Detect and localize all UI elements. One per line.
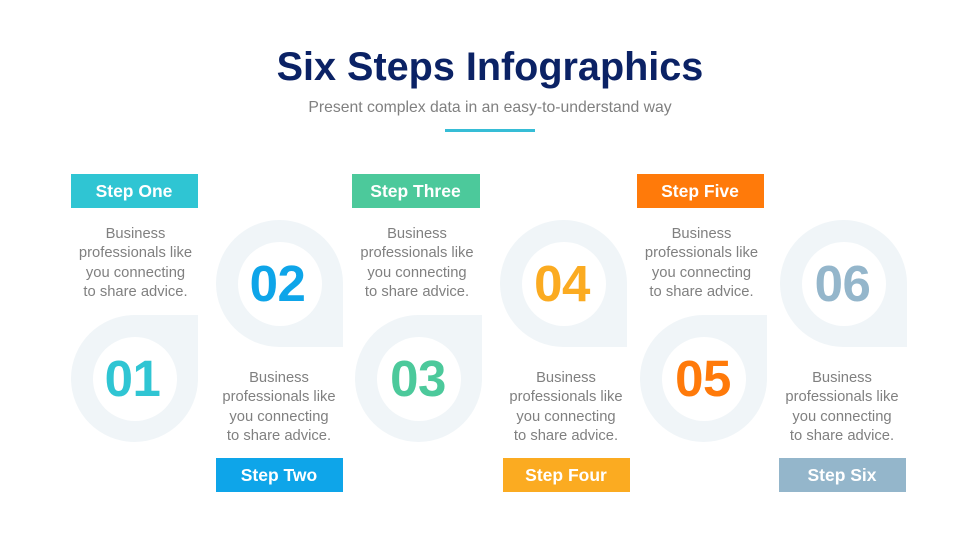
number 04: 04 (534, 254, 590, 312)
step six text: professionals like (785, 389, 899, 405)
number 03 (376, 336, 460, 420)
step four text: to share advice. (514, 428, 618, 444)
step two text (222, 370, 336, 444)
step six text: Business (812, 370, 872, 386)
step five text: Business (672, 226, 731, 242)
panel: step five (637, 174, 767, 442)
step one number badge (71, 315, 198, 442)
number 04 (522, 242, 606, 326)
step four text (509, 370, 623, 444)
step three text: to share advice. (365, 284, 469, 300)
number 06 (802, 242, 886, 326)
number 03: 03 (390, 350, 446, 406)
step two text: professionals like (222, 389, 336, 405)
step two text: Business (249, 370, 309, 386)
number 01: 01 (105, 350, 160, 406)
subtitle: Present complex data in an easy-to-understand way (308, 99, 672, 116)
step one text: to share advice. (83, 284, 188, 300)
step five text: professionals like (645, 245, 758, 261)
title: Six Steps Infographics (277, 45, 703, 89)
panel: step two (216, 220, 343, 492)
step four text: you connecting (516, 409, 616, 425)
step three label (352, 174, 480, 208)
title underline accent (445, 129, 535, 132)
step two label (216, 458, 343, 492)
step six text: to share advice. (790, 428, 894, 444)
step four text: Business (536, 370, 596, 386)
step two number badge (216, 220, 343, 347)
step one label (71, 174, 198, 208)
step five label: Step Five (661, 181, 739, 201)
panel: step four (500, 220, 630, 492)
panel: step one (71, 174, 198, 442)
step two label: Step Two (241, 465, 317, 485)
step five text: you connecting (652, 265, 751, 281)
step six text (785, 370, 899, 444)
step four label (503, 458, 630, 492)
step four label: Step Four (525, 465, 607, 485)
step five text: to share advice. (649, 284, 754, 300)
step one text (79, 226, 192, 300)
number 05 (662, 336, 746, 420)
step one text: professionals like (79, 245, 192, 261)
step five label (637, 174, 764, 208)
step three text: Business (387, 226, 447, 242)
step two text: to share advice. (227, 428, 331, 444)
step three label: Step Three (370, 181, 461, 201)
panel: step six (779, 220, 907, 492)
step two text: you connecting (229, 409, 329, 425)
step six label (779, 458, 906, 492)
number 02: 02 (250, 254, 305, 312)
step five text (645, 226, 758, 300)
number 02 (238, 242, 322, 326)
step one label: Step One (96, 181, 172, 201)
step six label: Step Six (807, 465, 877, 485)
step three text: professionals like (360, 245, 474, 261)
step three text: you connecting (367, 265, 467, 281)
step one text: you connecting (86, 265, 185, 281)
step six number badge (780, 220, 907, 347)
step four number badge (500, 220, 627, 347)
step five number badge (640, 315, 767, 442)
step three number badge (355, 315, 482, 442)
step three text (360, 226, 474, 300)
number 05: 05 (675, 350, 731, 406)
number 06: 06 (815, 254, 870, 312)
step four text: professionals like (509, 389, 623, 405)
step six text: you connecting (792, 409, 892, 425)
panel: step three (352, 174, 482, 442)
step one text: Business (106, 226, 165, 242)
number 01 (92, 336, 176, 420)
